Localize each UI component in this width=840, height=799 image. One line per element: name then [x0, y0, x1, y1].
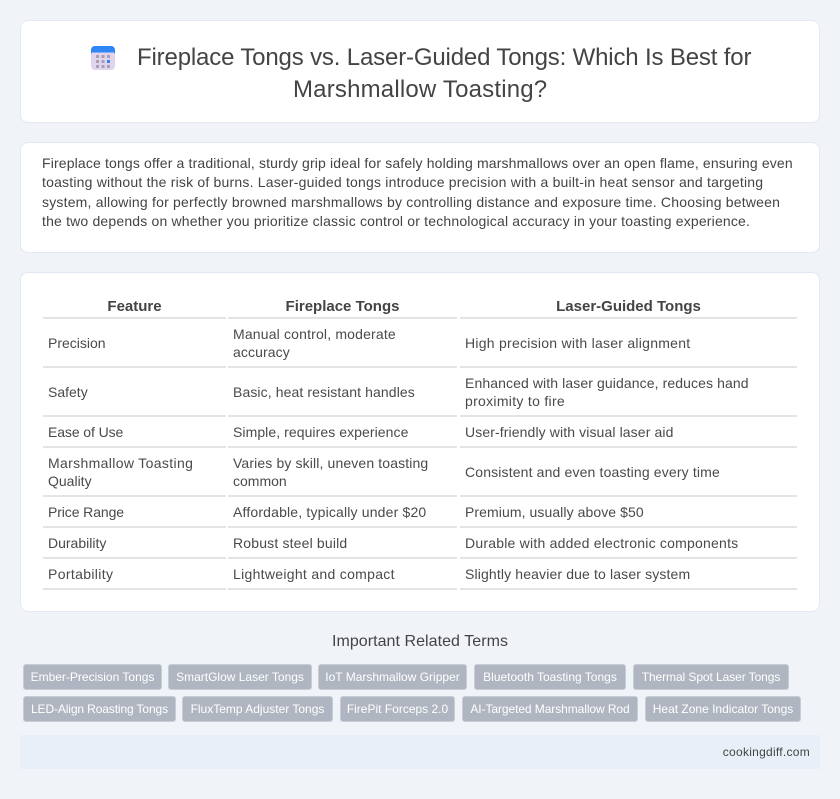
table row: Portability: Lightweight and compact [233, 566, 395, 582]
title: Fireplace Tongs vs. Laser-Guided Tongs: Which Is Best for [137, 44, 751, 71]
table row: Safety: Enhanced with laser guidance, reduces hand [465, 375, 749, 391]
text block: description [42, 155, 793, 229]
tag group: related terms: FluxTemp Adjuster Tongs [191, 702, 324, 716]
text block: description: toasting without the risk of burns. Laser-guided tongs introduce precision with a built-in heat sensor and targeting [42, 174, 763, 190]
table header: Laser-Guided Tongs [556, 298, 701, 315]
tag group: related terms: AI-Targeted Marshmallow Rod [470, 702, 630, 716]
title: Marshmallow Toasting? [293, 76, 547, 103]
tag group: related terms: Bluetooth Toasting Tongs [483, 670, 617, 684]
table row: Marshmallow Toasting Quality: Consistent and even toasting every time [465, 464, 720, 480]
table row: Ease of Use: Simple, requires experience [233, 424, 408, 440]
table header: Fireplace Tongs [286, 298, 399, 315]
tag group: related terms: SmartGlow Laser Tongs [176, 670, 304, 684]
tag group: related terms: Thermal Spot Laser Tongs [642, 670, 780, 684]
table row: Marshmallow Toasting Quality: Marshmallow Toasting [48, 455, 193, 471]
footer bar [20, 735, 820, 769]
table row: Marshmallow Toasting Quality: Varies by skill, uneven toasting [233, 455, 428, 471]
table row: Portability: Portability [48, 566, 113, 582]
tag group: related terms [23, 664, 801, 722]
table row: Price Range: Price Range [48, 504, 124, 520]
table row: Precision: Precision [48, 335, 106, 351]
table row: Durability: Durability [48, 535, 106, 551]
table header [43, 298, 797, 319]
table row: Safety [43, 375, 797, 417]
table row: Precision: Manual control, moderate [233, 326, 396, 342]
table row: Durability: Durable with added electronic components [465, 535, 738, 551]
table row: Portability: Slightly heavier due to laser system [465, 566, 690, 582]
tag group: related terms: Ember-Precision Tongs [31, 670, 154, 684]
text block: description: Fireplace tongs offer a traditional, sturdy grip ideal for safely holding marshmallows over an open flame, ensuring even [42, 155, 793, 171]
text block: description: system, allowing for perfectly browned marshmallows by controlling distance and exposure time. Choosing between [42, 194, 780, 210]
tag group: related terms: FirePit Forceps 2.0 [347, 702, 448, 716]
table row: Price Range: Affordable, typically under $20 [233, 504, 426, 520]
table row: Ease of Use: Ease of Use [48, 424, 123, 440]
heading: related terms: Important Related Terms [332, 633, 508, 650]
table row: Price Range [43, 504, 797, 528]
table row: Safety: Basic, heat resistant handles [233, 384, 415, 400]
panel: description [20, 142, 820, 253]
table row: Ease of Use: User-friendly with visual laser aid [465, 424, 673, 440]
table row: Marshmallow Toasting Quality [43, 455, 797, 497]
table row: Marshmallow Toasting Quality: Quality [48, 473, 92, 489]
table row: Precision [43, 326, 797, 368]
table header: Feature [107, 298, 162, 315]
panel: comparison table [20, 272, 820, 612]
panel: header [20, 20, 820, 123]
text block: description: the two depends on whether you prioritize classic control or technological accuracy in your toasting experience. [42, 213, 750, 229]
table row: Durability: Robust steel build [233, 535, 347, 551]
table row: Precision: High precision with laser alignment [465, 335, 690, 351]
tag group: related terms: Heat Zone Indicator Tongs [653, 702, 793, 716]
tag group: related terms: LED-Align Roasting Tongs [31, 702, 168, 716]
icon: calendar [91, 46, 115, 70]
table row: Durability [43, 535, 797, 559]
table row: Precision: accuracy [233, 344, 290, 360]
title [137, 44, 752, 103]
table row: Safety: proximity to fire [465, 393, 565, 409]
tag group: related terms: IoT Marshmallow Gripper [325, 670, 460, 684]
table row: Safety: Safety [48, 384, 88, 400]
table row: Price Range: Premium, usually above $50 [465, 504, 644, 520]
table row: Marshmallow Toasting Quality: common [233, 473, 287, 489]
footer text: cookingdiff.com [723, 745, 810, 759]
table row: Portability [43, 566, 797, 590]
table row: Ease of Use [43, 424, 797, 448]
